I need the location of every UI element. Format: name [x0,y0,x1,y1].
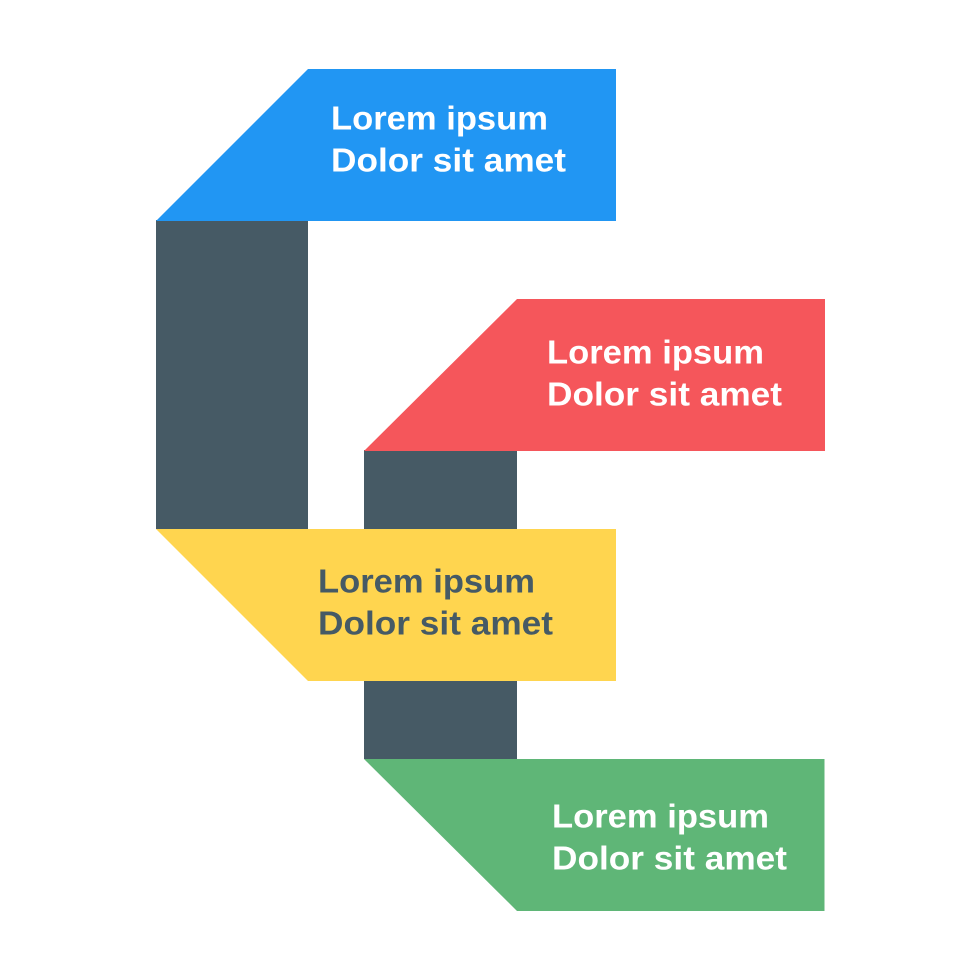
panel: blue banner [156,69,616,221]
green banner text: Lorem ipsum [552,798,769,836]
blue banner text: Lorem ipsum [331,100,548,138]
red banner text: Lorem ipsum [547,334,764,372]
panel: yellow banner [156,529,616,681]
left dark connector column [156,220,308,529]
green banner shape [364,759,824,911]
yellow banner text: Dolor sit amet [318,606,553,642]
yellow banner text: Lorem ipsum [318,564,535,600]
yellow banner text [318,564,553,642]
green banner text: Dolor sit amet [552,840,787,878]
blue banner text [331,100,566,180]
red banner text [547,334,782,414]
panel: red banner [364,299,825,451]
blue banner text: Dolor sit amet [331,142,566,180]
panel: green banner [364,759,824,911]
right dark connector column [364,450,517,759]
red banner shape [364,299,825,451]
yellow banner shape [156,529,616,681]
green banner text [552,798,787,878]
red banner text: Dolor sit amet [547,376,782,414]
blue banner shape [156,69,616,221]
